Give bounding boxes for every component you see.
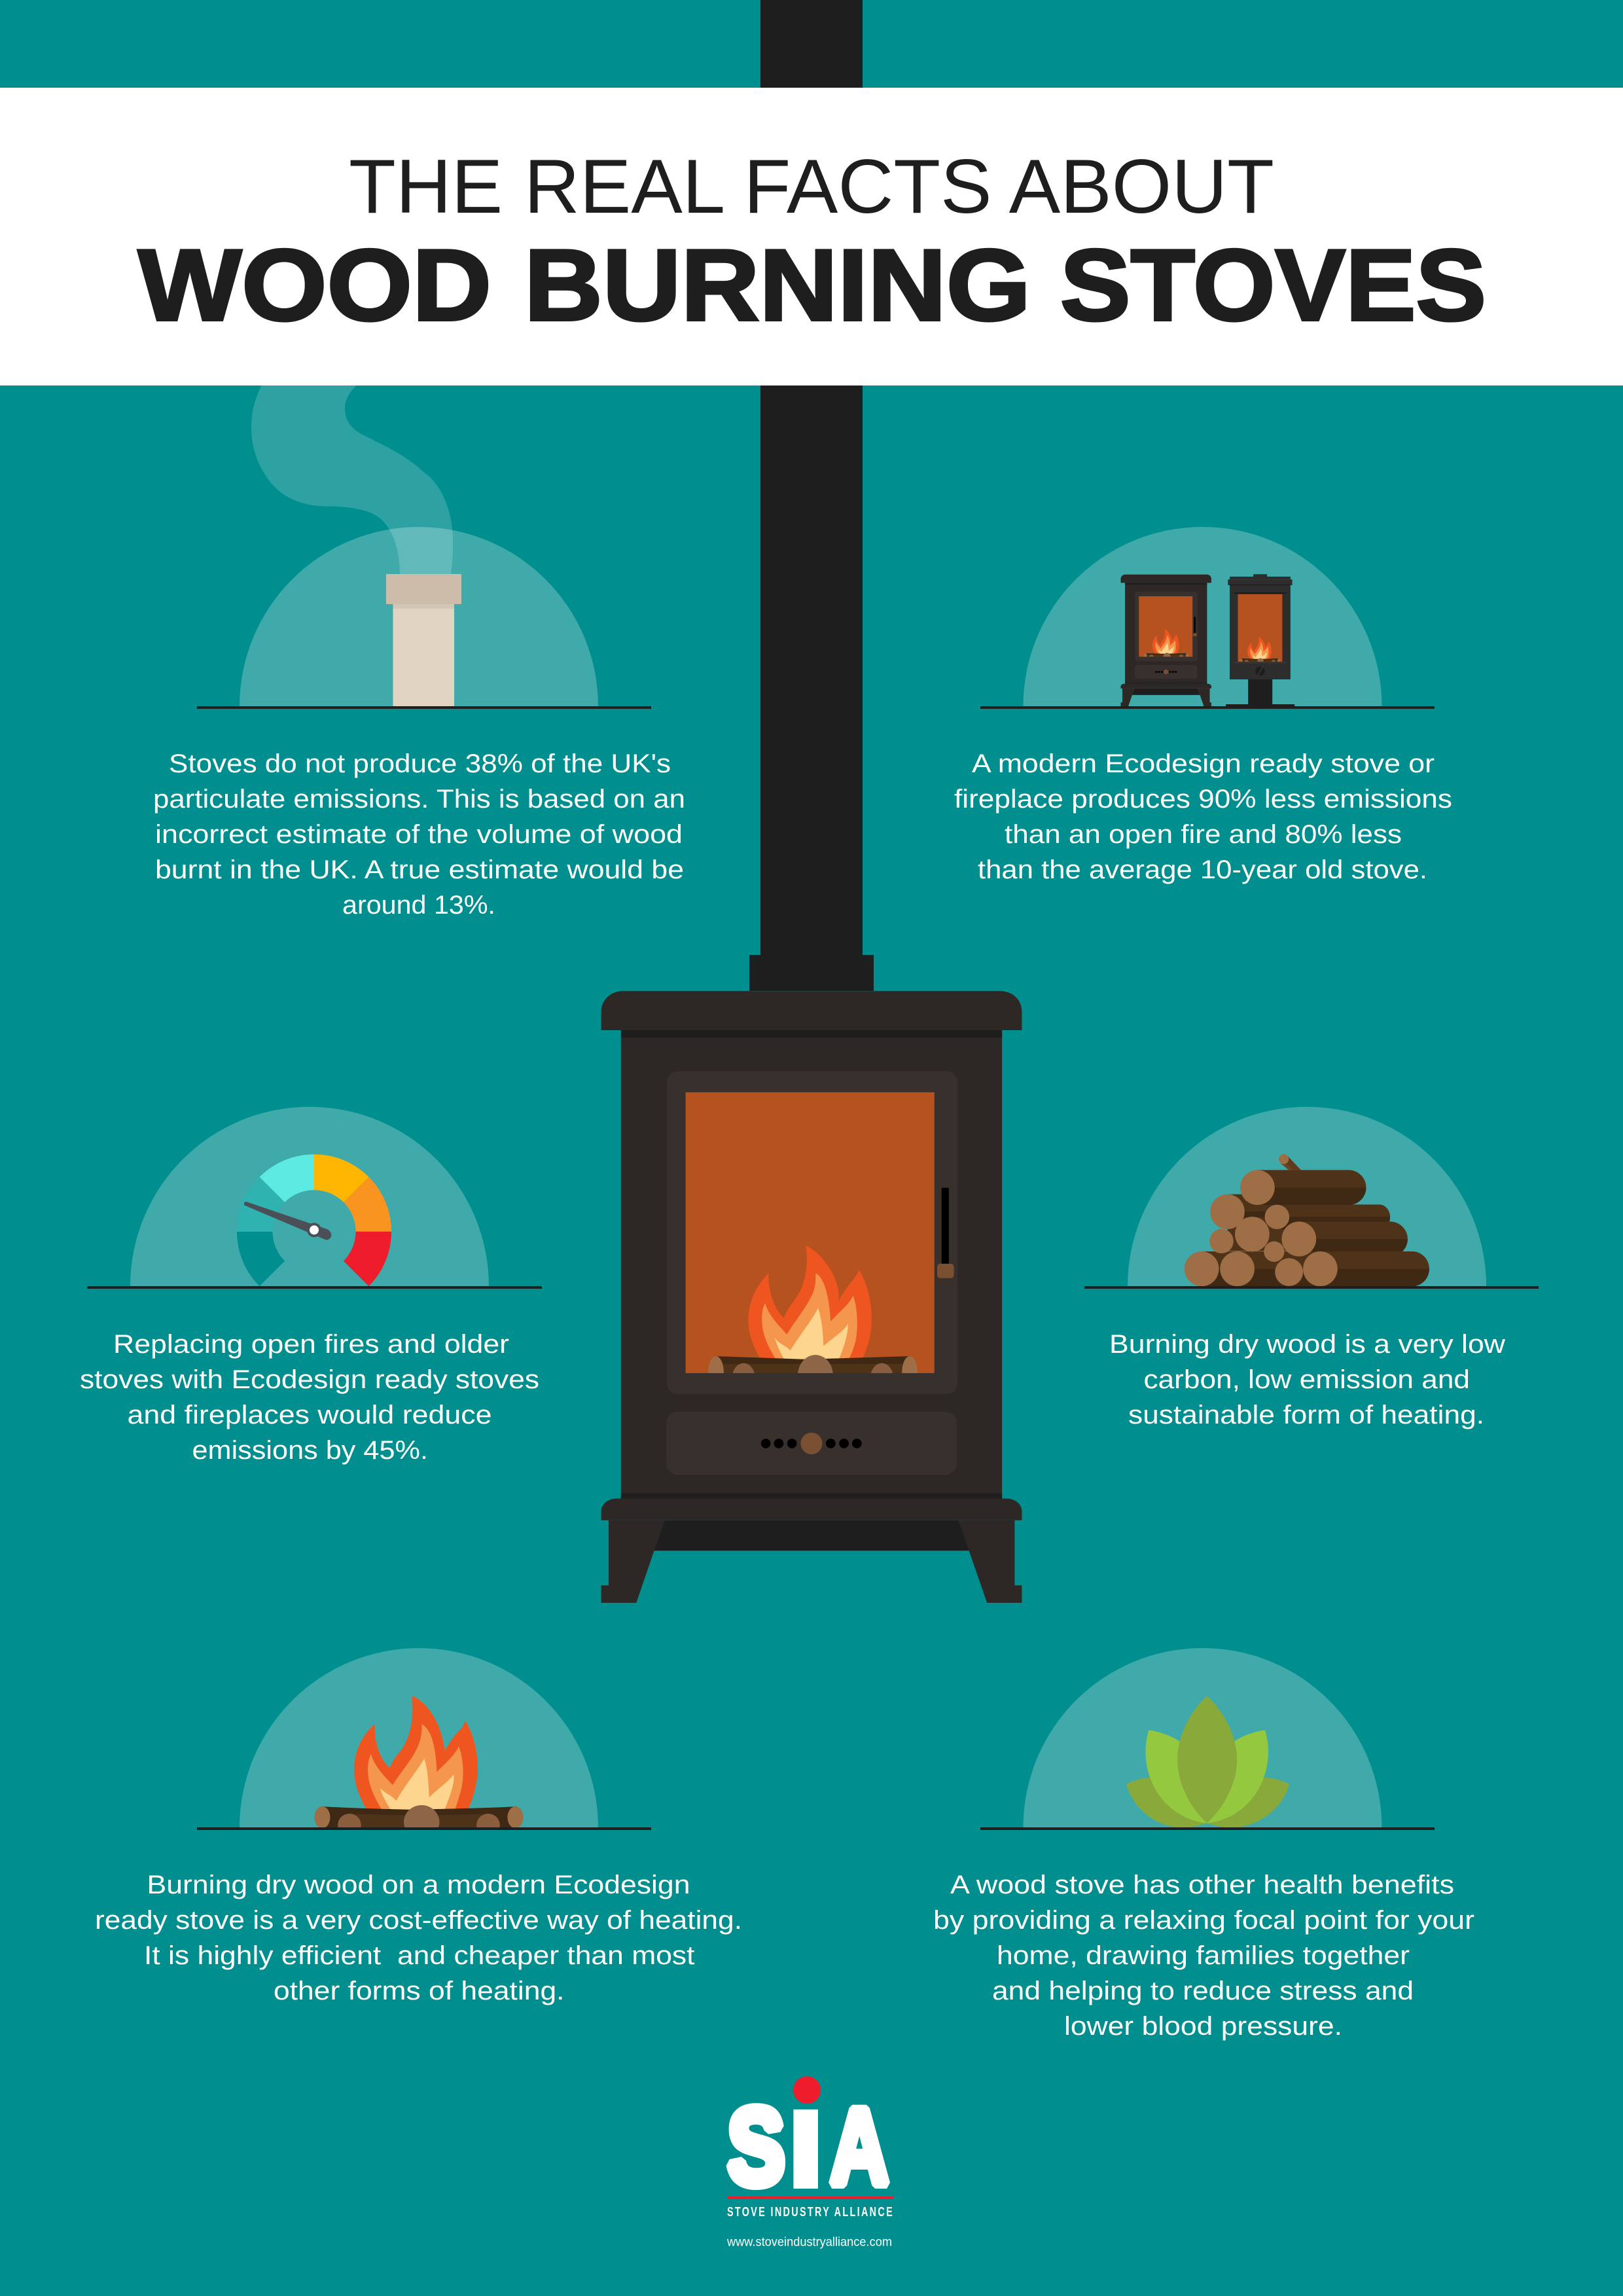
title line 2: BURNING [524, 228, 1031, 342]
ground line [980, 1827, 1435, 1830]
text: chimney fact: around 13%. [342, 891, 495, 920]
text: chimney fact: particulate emissions. This is based on an [153, 785, 685, 814]
chimney pot cap [386, 574, 461, 604]
title band [0, 88, 1623, 386]
logo red dot [793, 2076, 821, 2104]
gauge needle [244, 1202, 331, 1240]
text: gauge fact [80, 1330, 539, 1465]
text: log pile fact: Burning dry wood is a very low [1109, 1330, 1505, 1359]
text: gauge fact: and fireplaces would reduce [127, 1401, 492, 1429]
stove body [621, 1033, 1002, 1499]
text: ecodesign fact: fireplace produces 90% less emissions [954, 785, 1452, 814]
flue pipe [760, 0, 863, 956]
text: leaf fact: home, drawing families together [997, 1941, 1410, 1970]
ground line [197, 1827, 651, 1830]
dome [240, 527, 598, 706]
title line 2: WOOD [138, 228, 491, 342]
stove top plate [601, 991, 1022, 1030]
stove plinth [601, 1499, 1022, 1520]
dome [1024, 527, 1382, 706]
text: campfire fact: Burning dry wood on a modern Ecodesign [147, 1871, 690, 1899]
logo rule [728, 2197, 893, 2199]
door frame [667, 1071, 957, 1394]
text: leaf fact: A wood stove has other health benefits [950, 1871, 1454, 1899]
text: chimney fact: incorrect estimate of the volume of wood [155, 820, 683, 849]
text: gauge fact: stoves with Ecodesign ready stoves [80, 1365, 539, 1394]
logo letters: A [830, 2087, 889, 2208]
logs [716, 1356, 910, 1373]
ground line [980, 706, 1435, 709]
text: campfire fact: It is highly efficient and cheaper than most [144, 1941, 695, 1970]
text: gauge fact: emissions by 45%. [192, 1436, 428, 1465]
outer flame [354, 1696, 478, 1810]
title line 2 [138, 228, 1486, 342]
ground line [1084, 1286, 1539, 1289]
fire [708, 1246, 918, 1397]
text: log pile fact [1109, 1330, 1505, 1429]
panel: chimney [197, 386, 651, 709]
flue collar [749, 955, 874, 991]
panel: campfire [197, 1648, 651, 1839]
title line 1: THE REAL FACTS ABOUT [349, 143, 1274, 229]
text: leaf fact: and helping to reduce stress and [992, 1977, 1414, 2005]
logo letters: S [728, 2086, 785, 2207]
text: log pile fact: sustainable form of heating. [1128, 1401, 1484, 1429]
text: leaf fact [933, 1871, 1474, 2041]
dome [1024, 1648, 1382, 1827]
dome [240, 1648, 598, 1827]
text: chimney fact: burnt in the UK. A true estimate would be [155, 855, 684, 884]
logs [1185, 1154, 1429, 1286]
ground line [88, 1286, 542, 1289]
text: chimney fact [153, 749, 685, 920]
campfire [314, 1696, 524, 1839]
text: campfire fact: other forms of heating. [274, 1977, 564, 2005]
gauge dial [237, 1155, 391, 1286]
title line 2: STOVES [1060, 228, 1486, 342]
dome [130, 1107, 489, 1286]
small stove copy [1120, 575, 1211, 706]
text: log pile fact: carbon, low emission and [1144, 1365, 1470, 1394]
inner flame [380, 1759, 454, 1810]
text: ecodesign fact: than the average 10-year old stove. [978, 855, 1427, 884]
flame [748, 1246, 872, 1359]
ground line [197, 706, 651, 709]
air vent [761, 1433, 862, 1454]
panel: gauge [88, 1107, 542, 1289]
middle flame [368, 1724, 463, 1810]
logo url: www.stoveindustryalliance.com [726, 2236, 892, 2249]
logo: SIA [726, 2076, 893, 2249]
stove legs [601, 1520, 1022, 1603]
logo letters [728, 2085, 889, 2214]
chimney stack [393, 604, 454, 706]
twig [1281, 1157, 1301, 1170]
text: campfire fact: ready stove is a very cost-effective way of heating. [95, 1906, 742, 1935]
text: leaf fact: lower blood pressure. [1064, 2012, 1342, 2041]
smoke [251, 386, 453, 575]
text: leaf fact: by providing a relaxing focal point for your [933, 1906, 1474, 1935]
central stove [601, 955, 1022, 1603]
text: campfire fact [95, 1871, 742, 2005]
glass [686, 1092, 935, 1373]
logo letters: I [782, 2085, 829, 2214]
text: ecodesign fact: than an open fire and 80% less [1005, 820, 1402, 849]
panel: log pile [1084, 1107, 1539, 1289]
panel: ecodesign stoves [980, 527, 1435, 709]
logo name: STOVE INDUSTRY ALLIANCE [727, 2204, 893, 2219]
logs [321, 1806, 517, 1827]
text: ecodesign fact: A modern Ecodesign ready stove or [972, 749, 1435, 778]
text: gauge fact: Replacing open fires and older [113, 1330, 509, 1359]
dome [1128, 1107, 1486, 1286]
ash pan panel [666, 1412, 957, 1475]
lotus leaves [1126, 1696, 1289, 1827]
stove base shadow [654, 1520, 970, 1551]
pedestal stove [1226, 574, 1294, 706]
text: chimney fact: Stoves do not produce 38% of the UK's [169, 749, 671, 778]
text: ecodesign fact [954, 749, 1452, 884]
door handle [942, 1188, 949, 1264]
panel: leaf [980, 1648, 1435, 1830]
